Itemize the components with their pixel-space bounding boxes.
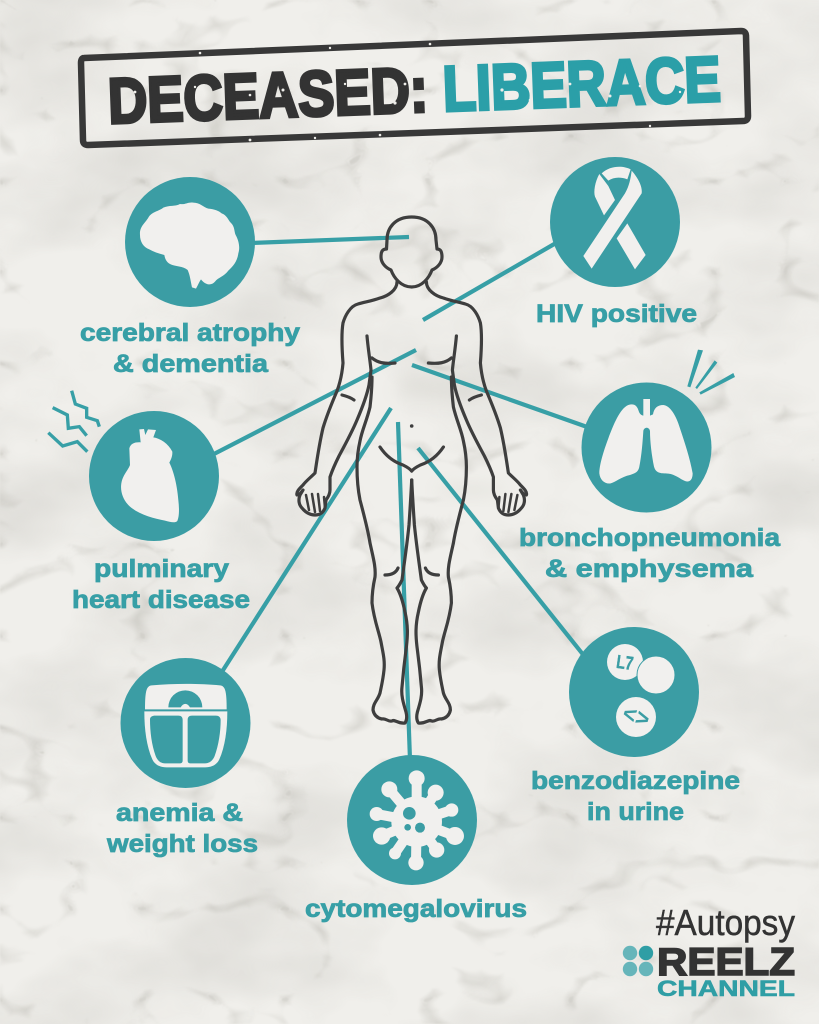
head — [381, 217, 442, 287]
stamp border — [81, 31, 748, 145]
label: cerebral atrophy & dementia: cerebral atrophy — [80, 319, 300, 347]
icon: bathroom scale — [144, 684, 227, 767]
title text — [107, 43, 722, 137]
label: cerebral atrophy & dementia: & dementia — [113, 350, 269, 378]
human body outline — [297, 217, 527, 723]
pills panel — [531, 627, 740, 826]
title text: LIBERACE — [441, 43, 722, 125]
logo dots — [623, 946, 653, 976]
icon: awareness ribbon — [583, 167, 646, 269]
virus panel — [305, 755, 527, 923]
label: bronchopneumonia & emphysema: & emphysema — [545, 555, 754, 583]
circle: pills — [569, 627, 699, 757]
label: pulminary heart disease — [72, 555, 250, 614]
label: HIV positive: HIV positive — [536, 300, 697, 328]
navel — [410, 424, 414, 428]
icon: heart — [121, 429, 179, 522]
circle: lungs — [582, 382, 712, 512]
icon: lungs — [599, 399, 693, 483]
label: anemia & weight loss: anemia & — [116, 799, 243, 827]
brain panel — [80, 177, 300, 378]
icon: lungs spark lines — [687, 350, 735, 395]
icon: pills: L7 — [615, 652, 635, 675]
left half of body — [297, 282, 397, 515]
title text: DECEASED: — [107, 54, 429, 137]
circle: heart — [89, 411, 219, 541]
label: bronchopneumonia & emphysema: bronchopneumonia — [519, 524, 781, 552]
icon: pills — [607, 644, 675, 737]
circle: brain — [125, 177, 255, 307]
label: benzodiazepine in urine: benzodiazepine — [531, 767, 740, 795]
label: benzodiazepine in urine — [531, 767, 740, 826]
label: anemia & weight loss: weight loss — [106, 830, 258, 858]
icon: pills: <> — [619, 700, 653, 733]
right half of body — [412, 282, 527, 723]
hashtag: #Autopsy — [656, 902, 795, 943]
title stamp — [81, 31, 748, 145]
icon: virus — [370, 770, 464, 870]
circle: virus — [347, 755, 477, 885]
lungs panel — [519, 350, 781, 583]
label: bronchopneumonia & emphysema — [519, 524, 781, 583]
label: pulminary heart disease: heart disease — [72, 586, 250, 614]
heart panel — [48, 391, 250, 614]
label: benzodiazepine in urine: in urine — [587, 798, 684, 826]
logo: Reelz Channel — [623, 941, 795, 1001]
left elbow and knee marks — [342, 395, 398, 575]
HIV panel — [536, 157, 697, 328]
left groin line — [380, 447, 412, 471]
icon: brain — [140, 202, 239, 289]
logo wordmark CHANNEL: CHANNEL — [657, 976, 795, 1001]
connector lines — [212, 237, 590, 760]
circle: HIV — [550, 157, 680, 287]
scale panel — [106, 658, 258, 858]
left fingers — [306, 494, 325, 512]
label: cytomegalovirus: cytomegalovirus — [305, 895, 527, 923]
stamp wear specks — [134, 43, 681, 141]
left chest line — [372, 358, 395, 363]
label: pulminary heart disease: pulminary — [94, 555, 229, 583]
label: cerebral atrophy & dementia — [80, 319, 300, 378]
label: anemia & weight loss — [106, 799, 258, 858]
icon: heart spark lines — [48, 391, 99, 452]
logo wordmark REELZ: REELZ — [657, 941, 795, 984]
circle: scale — [120, 658, 250, 788]
